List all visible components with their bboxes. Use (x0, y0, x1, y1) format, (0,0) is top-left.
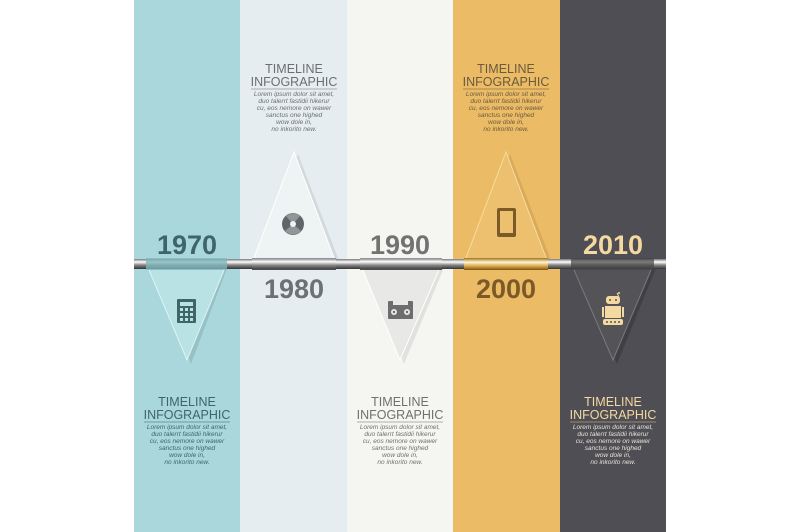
text block 1990: duo talerrt fastidii hikerur (364, 431, 436, 438)
text block 1980 (251, 62, 337, 133)
text block 2010: Lorem ipsum dolor sit amet, (573, 424, 653, 431)
year 2010: 2010 (583, 230, 643, 260)
text block 2010: wow dole in, (595, 452, 631, 459)
text block 1980: duo talerrt fastidii hikerur (258, 98, 330, 105)
text block 1970: wow dole in, (169, 452, 205, 459)
text block 2000: sanctus one highed (478, 112, 535, 119)
text block 2010: no inkorito new. (590, 459, 636, 466)
text block 2000 (463, 62, 549, 133)
text block 2000: no inkorito new. (483, 126, 529, 133)
text block 1990: Lorem ipsum dolor sit amet, (360, 424, 440, 431)
text block 1990: no inkorito new. (377, 459, 423, 466)
panel: column 2000 (453, 0, 560, 532)
icon: robot (602, 292, 624, 325)
year 2000: 2000 (476, 274, 536, 304)
panel: column 2010 (560, 0, 666, 532)
text block 1980: TIMELINE (265, 62, 323, 76)
year 1990: 1990 (370, 230, 430, 260)
text block 2000: TIMELINE (477, 62, 535, 76)
icon: calculator (177, 299, 196, 323)
text block 1980: sanctus one highed (266, 112, 323, 119)
text block 2010: TIMELINE (584, 395, 642, 409)
panel: column 1980 (240, 0, 347, 532)
text block 2000: INFOGRAPHIC (463, 75, 549, 89)
text block 1990: cu, eos nemore on wawer (363, 438, 438, 445)
text block 2000: Lorem ipsum dolor sit amet, (466, 91, 546, 98)
panel: column 1970 (134, 0, 241, 532)
text block 1980: INFOGRAPHIC (251, 75, 337, 89)
text block 1970: cu, eos nemore on wawer (150, 438, 225, 445)
triangle 2010 (571, 263, 658, 364)
icon: disc (282, 213, 304, 235)
text block 1990: TIMELINE (371, 395, 429, 409)
text block 1970: no inkorito new. (164, 459, 210, 466)
text block 1980: Lorem ipsum dolor sit amet, (254, 91, 334, 98)
text block 1990: wow dole in, (382, 452, 418, 459)
triangle 1980 (252, 152, 340, 263)
text block 1980: no inkorito new. (271, 126, 317, 133)
text block 2010: sanctus one highed (585, 445, 642, 452)
text block 1970: duo talerrt fastidii hikerur (151, 431, 223, 438)
icon: cassette (388, 301, 413, 319)
text block 1990: INFOGRAPHIC (357, 408, 443, 422)
text block 1970: TIMELINE (158, 395, 216, 409)
triangle 2000 (464, 152, 552, 263)
icon: phone (497, 208, 516, 237)
text block 1970 (144, 395, 230, 466)
text block 1990 (357, 395, 443, 466)
text block 1970: INFOGRAPHIC (144, 408, 230, 422)
year 1980: 1980 (264, 274, 324, 304)
text block 1970: sanctus one highed (159, 445, 216, 452)
text block 2010 (570, 395, 656, 466)
text block 2010: INFOGRAPHIC (570, 408, 656, 422)
text block 1970: Lorem ipsum dolor sit amet, (147, 424, 227, 431)
rod (134, 258, 666, 270)
text block 2000: wow dole in, (488, 119, 524, 126)
text block 1990: sanctus one highed (372, 445, 429, 452)
text block 1980: wow dole in, (276, 119, 312, 126)
text block 1980: cu, eos nemore on wawer (257, 105, 332, 112)
panel: column 1990 (347, 0, 454, 532)
text block 2000: cu, eos nemore on wawer (469, 105, 544, 112)
triangle 1990 (360, 263, 446, 364)
year 1970: 1970 (157, 230, 217, 260)
text block 2010: cu, eos nemore on wawer (576, 438, 651, 445)
text block 2000: duo talerrt fastidii hikerur (470, 98, 542, 105)
text block 2010: duo talerrt fastidii hikerur (577, 431, 649, 438)
triangle 1970 (146, 263, 229, 364)
